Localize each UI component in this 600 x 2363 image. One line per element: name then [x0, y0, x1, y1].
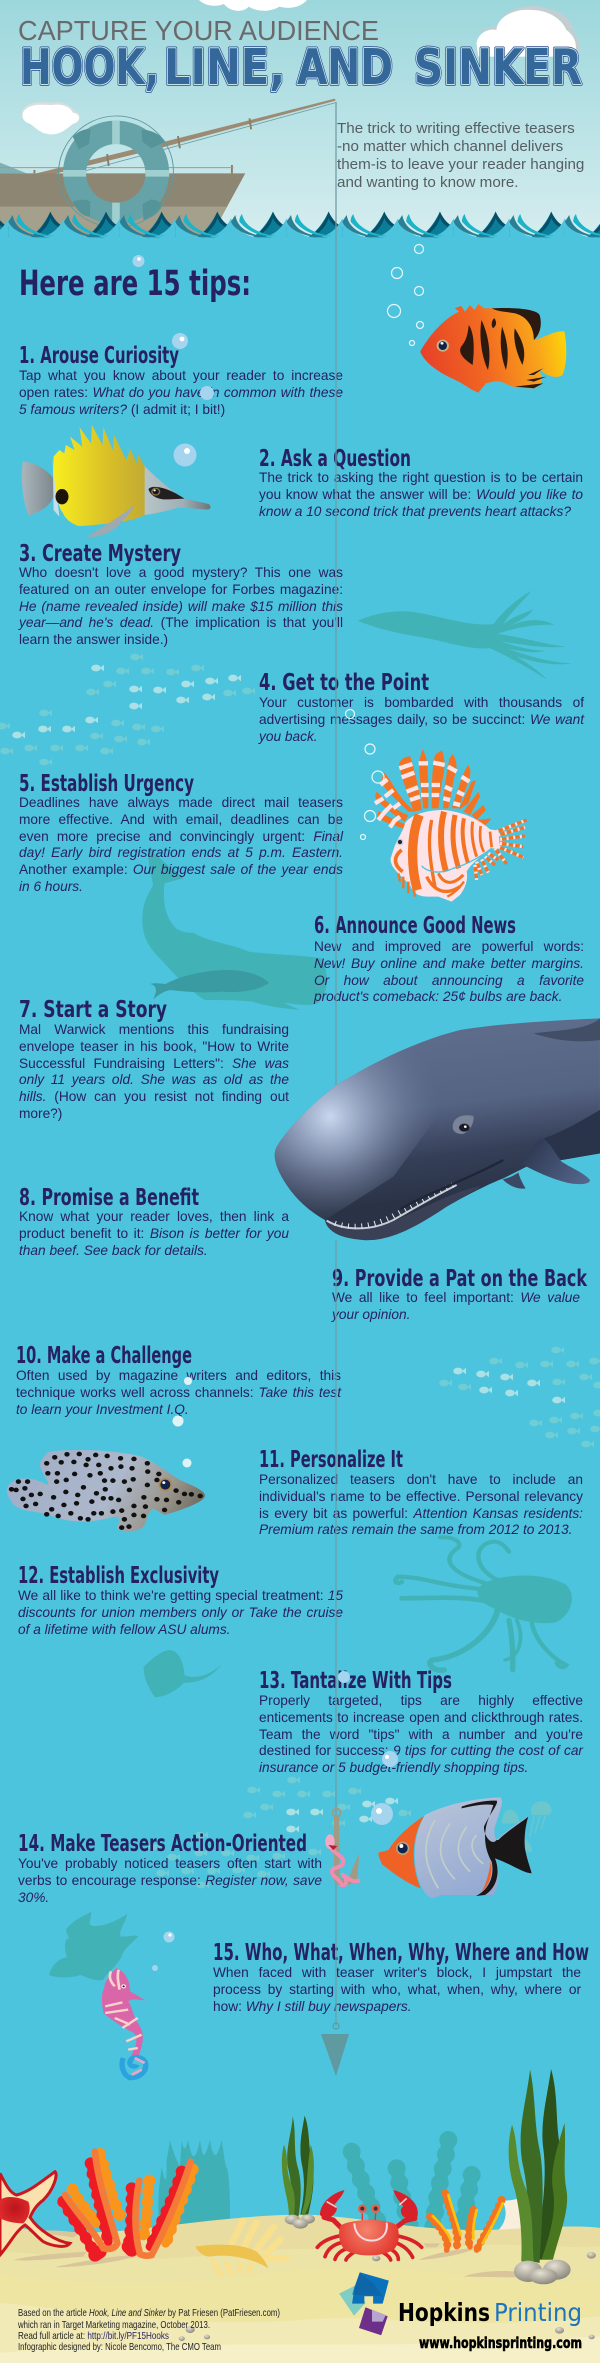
- tip 13 body: destined for success: 9 tips for cutting the cost of car: [259, 1743, 583, 1758]
- tip 14 heading: 14. Make Teasers Action-Oriented: [18, 1831, 307, 1857]
- tail and lower fins: [475, 820, 527, 880]
- tip 1: [19, 343, 343, 417]
- tip 2 body: you know what the answer will be: Would you like to: [259, 487, 583, 502]
- tip 3 body: [18, 565, 343, 647]
- tip 11 body: Premium rates remain the same from 2012 to 2013.: [259, 1522, 572, 1537]
- light fish: [286, 1798, 398, 1832]
- white ring bubbles: [346, 244, 424, 840]
- rocks middle: [285, 2214, 315, 2229]
- tip 11 body: individual's name to be effective. Personal relevancy: [259, 1489, 583, 1504]
- lionfish body: [391, 810, 500, 902]
- credits: Infographic designed by: Nicole Bencomo, The CMO Team: [18, 2341, 221, 2353]
- tip 4 body: you back.: [259, 729, 318, 744]
- tip 5 heading: 5. Establish Urgency: [19, 771, 194, 797]
- coral right: [430, 2193, 503, 2250]
- tip 6 body: New and improved are powerful words:: [314, 939, 584, 954]
- spine bars: [375, 763, 469, 827]
- sand shadows left: [13, 2231, 140, 2267]
- whale eye: [453, 1115, 474, 1134]
- tip 8 body: Know what your reader loves, then link a: [19, 1209, 289, 1224]
- whale small fin: [503, 1173, 526, 1189]
- tip 14 body: [18, 1856, 322, 1906]
- tip 8 body: than beef. See back for details.: [19, 1243, 208, 1258]
- title: hook, line, and sinker: LINE,: [164, 39, 285, 96]
- tip 10: [16, 1343, 342, 1417]
- tip 12 body: [18, 1588, 343, 1637]
- spotted fish: [7, 1450, 205, 1531]
- cloud small: [22, 102, 80, 134]
- tip 3 body: He (name revealed inside) will make $15 million this: [19, 599, 343, 614]
- turtle silhouette: [49, 1912, 139, 1980]
- worm: [325, 1834, 358, 1885]
- blue bubbles: [132, 255, 398, 1971]
- tip 7 body: Successful Fundraising Letters": She was: [19, 1056, 289, 1071]
- dark fish: [148, 1777, 411, 1888]
- lionfish: [375, 749, 527, 902]
- tip 7: [19, 997, 289, 1121]
- tip 2 body: The trick to asking the right question is to be certain: [259, 470, 583, 485]
- tip 13 heading: 13. Tantalize With Tips: [259, 1668, 452, 1694]
- tip 11 heading: 11. Personalize It: [259, 1447, 403, 1473]
- tip 7 body: [19, 1022, 289, 1121]
- coral center: [65, 2152, 191, 2256]
- sperm whale: [275, 1018, 600, 1240]
- tip 13 body: Properly targeted, tips are highly effective: [259, 1693, 583, 1708]
- sky: [0, 0, 600, 240]
- tip 2 heading: 2. Ask a Question: [259, 446, 411, 472]
- tip 7 body: more?): [19, 1106, 62, 1121]
- tip 9 body: We all like to feel important: We value: [332, 1290, 580, 1305]
- tip 13 body: Team the word "tips" with a number and you're: [259, 1727, 583, 1742]
- tip 8 heading: 8. Promise a Benefit: [19, 1185, 199, 1211]
- light fish: [453, 1368, 565, 1403]
- Hopkins: Hopkins: [398, 2298, 490, 2327]
- dark fish: [439, 1347, 600, 1447]
- tip 3 body: learn the answer inside.): [19, 632, 168, 647]
- tip 15 body: When faced with teaser writer's block, I jumpstart the: [213, 1965, 581, 1980]
- tip 4 body: [258, 695, 584, 744]
- small whale inside: [150, 970, 269, 999]
- whale back shade: [533, 1018, 600, 1041]
- tip 5 body: even more precise and convincingly urgent: Final: [19, 829, 343, 844]
- tip 5 body: [19, 795, 344, 894]
- tip 14 body: You've probably noticed teasers often start with: [18, 1856, 322, 1871]
- intro text: The trick to writing effective teasers: [337, 120, 575, 137]
- tip 14 body: verbs to encourage response: Register now, save: [18, 1873, 322, 1888]
- tip 6 body: Or how about announcing a favorite: [314, 973, 584, 988]
- tip 4: [258, 670, 584, 744]
- tip 2 body: know a 10 second trick that prevents heart attacks?: [259, 504, 571, 519]
- white bubbles: [172, 1377, 192, 1468]
- lionfish stripes: [396, 812, 492, 897]
- tip 5 body: Another example: Our biggest sale of the year ends: [19, 862, 343, 877]
- tip 3: [18, 541, 343, 647]
- tip 3 body: featured on an outer envelope for Forbes magazine:: [19, 582, 343, 597]
- pebbles: [179, 2252, 596, 2341]
- sand shadows right: [418, 2243, 517, 2277]
- school near hook: [148, 1777, 411, 1888]
- tip 12 body: of a lifetime with fellow ASU alums.: [18, 1622, 230, 1637]
- school upper left: [0, 654, 255, 765]
- tip 12: [18, 1563, 343, 1637]
- tip 7 heading: 7. Start a Story: [19, 997, 167, 1023]
- tip 7 body: hills. (How can you resist not finding out: [19, 1089, 289, 1104]
- gum and teeth: [327, 1185, 457, 1228]
- tip 7 body: Mal Warwick mentions this fundraising: [19, 1022, 289, 1037]
- school light fish: [12, 665, 241, 738]
- fish stripes: [462, 1801, 532, 1896]
- tip 15 body: [213, 1965, 581, 2015]
- sand layers: [0, 2215, 600, 2363]
- tip 10 body: technique works well across channels: Take this test: [16, 1385, 341, 1400]
- credits: Based on the article Hook, Line and Sinker by Pat Friesen (PatFriesen.com): [18, 2307, 280, 2319]
- tip 11 body: Personalized teasers don't have to include an: [259, 1472, 583, 1487]
- tip 1 body: [19, 368, 343, 417]
- large whale silhouette: [142, 848, 327, 1010]
- stingray silhouette: [144, 1650, 222, 1697]
- title line: capture your audience: CAPTURE YOUR AUDIENCE: [18, 15, 379, 46]
- coral red base: [63, 2163, 182, 2255]
- back seaweed right and shell: [352, 2140, 523, 2232]
- tip 6: [314, 913, 584, 1004]
- heading: here are 15 tips: Here are 15 tips:: [19, 264, 251, 304]
- seabed: [0, 2069, 600, 2363]
- tip 13: [259, 1668, 584, 1775]
- rocks right: [514, 2260, 571, 2284]
- coral light tips: [73, 2154, 193, 2243]
- tip 10 body: Often used by magazine writers and editors, this: [16, 1368, 341, 1383]
- boat hull: [0, 173, 245, 237]
- tip 4 body: Your customer is bombarded with thousands of: [259, 695, 584, 710]
- tip 11: [259, 1447, 583, 1537]
- tip 1 heading: 1. Arouse Curiosity: [19, 343, 179, 369]
- tip 3 body: year—and he's dead. (The implication is that you'll: [19, 615, 343, 630]
- seaweed middle: [282, 2116, 314, 2216]
- title: hook, line, and sinker: HOOK,: [20, 39, 159, 96]
- logo mark: [339, 2272, 389, 2335]
- tip 10 body: [16, 1368, 342, 1417]
- jellyfish and butterfly fish: [378, 1797, 551, 1898]
- tip 12 body: We all like to think we're getting special treatment: 15: [18, 1588, 343, 1603]
- tip 4 body: advertising messages daily, so be succinct: We want: [259, 712, 584, 727]
- tip 13 body: insurance or 5 budget-friendly shopping tips.: [259, 1760, 528, 1775]
- tip 5 body: Deadlines have always made direct mail teasers: [19, 795, 343, 810]
- tip 9 body: [331, 1290, 580, 1322]
- hook and worm: [325, 1809, 359, 1886]
- waves: [0, 212, 600, 244]
- intro text: them-is to leave your reader hanging: [337, 156, 584, 173]
- credits: which ran in Target Marketing magazine, October 2013.: [17, 2319, 210, 2331]
- title: hook, line, and sinker: AND: [297, 39, 393, 96]
- dorsal spines: [375, 749, 492, 829]
- mountain: [0, 163, 27, 173]
- lower jaw: [326, 1186, 482, 1240]
- cloud right: [476, 6, 580, 57]
- tip 5 body: in 6 hours.: [19, 879, 83, 894]
- intro text: -no matter which channel delivers: [337, 138, 563, 155]
- tip 9: [331, 1266, 588, 1322]
- tip 2 body: [259, 470, 583, 519]
- starfish: [0, 2172, 70, 2255]
- tip 15 body: process by starting with who, what, when, why, where or: [213, 1982, 581, 1997]
- tip 8 body: product benefit to it: Bison is better for you: [19, 1226, 289, 1241]
- tip 6 body: New! Buy online and make better margins.: [314, 956, 584, 971]
- tip 12 body: discounts for union members only or Take the cruise: [18, 1605, 343, 1620]
- cloud top: [199, 0, 307, 11]
- tip 11 body: is every bit as powerful: Attention Kansas residents:: [259, 1506, 583, 1521]
- tip 5 body: more effective. And with email, deadlines can be: [19, 812, 343, 827]
- sinker: [321, 2023, 349, 2076]
- tip 4 heading: 4. Get to the Point: [259, 670, 429, 696]
- whale head highlight: [275, 1030, 467, 1220]
- tip 11 body: [259, 1472, 583, 1537]
- back seaweed left: [158, 2140, 230, 2230]
- tip 8: [19, 1185, 289, 1258]
- whale fin: [523, 1138, 590, 1184]
- Printing: Printing: [494, 2298, 582, 2327]
- whale body: [275, 1018, 600, 1240]
- fish body: [415, 1797, 532, 1898]
- tip 6 body: [314, 939, 584, 1004]
- intro text: and wanting to know more.: [337, 174, 519, 191]
- credits: [17, 2307, 280, 2353]
- tip 3 heading: 3. Create Mystery: [19, 541, 181, 567]
- clouds: [22, 0, 580, 134]
- tip 13 body: enticements to increase open and clickthrough rates.: [259, 1710, 583, 1725]
- tip 1 body: Tap what you know about your reader to increase: [19, 368, 343, 383]
- tall seaweed: [509, 2069, 567, 2263]
- railing: [0, 166, 233, 169]
- credits: Read full article at: http://bit.ly/PF15Hooks: [18, 2330, 169, 2342]
- tip 13 body: [259, 1693, 583, 1777]
- school upper right: [439, 1347, 600, 1447]
- tip 8 body: [19, 1209, 289, 1258]
- school dark fish: [0, 654, 255, 765]
- tip 12 heading: 12. Establish Exclusivity: [18, 1563, 219, 1589]
- tip 5: [19, 771, 344, 894]
- tip 15 body: how: Why I still buy newspapers.: [213, 1999, 412, 2014]
- title: hook, line, and sinker: LINE,: [164, 39, 285, 96]
- title: hook, line, and sinker: HOOK,: [20, 39, 159, 96]
- title: hook, line, and sinker: AND: [297, 39, 393, 96]
- crab: [317, 2190, 422, 2260]
- title: hook, line, and sinker: [20, 39, 582, 96]
- mouth line: [400, 1160, 503, 1209]
- fish face: [378, 1816, 424, 1888]
- tip 15: [213, 1938, 589, 2016]
- jellyfish silhouettes: [502, 1801, 551, 1852]
- intro text: [337, 120, 584, 191]
- coral left: [63, 2152, 193, 2256]
- tip 1 body: open rates: What do you have in common with these: [19, 385, 343, 400]
- tip 14 body: 30%.: [18, 1890, 49, 1905]
- title: hook, line, and sinker: AND: [297, 39, 393, 96]
- anemone: [195, 2221, 286, 2275]
- fishing line: [335, 102, 337, 2026]
- tip 3 body: Who doesn't love a good mystery? This one was: [19, 565, 343, 580]
- tip 6 body: product's comeback: 25¢ bulbs are back.: [314, 989, 562, 1004]
- tip 2: [259, 446, 583, 519]
- boat, rod and life ring: [0, 99, 336, 237]
- tip 1 body: 5 famous writers? (I admit it; I bit!): [19, 402, 225, 417]
- logo wordmark: [398, 2298, 582, 2352]
- octopus silhouette: [396, 1537, 572, 1670]
- orange fish: [420, 304, 566, 393]
- yellow fish: [22, 425, 210, 537]
- tip 10 heading: 10. Make a Challenge: [16, 1343, 192, 1369]
- tip 10 body: to learn your Investment I.Q.: [16, 1402, 189, 1417]
- squid silhouette: [358, 591, 572, 680]
- life ring: [59, 116, 173, 227]
- tip 5 body: day! Early bird registration ends at 5 p.m. Eastern.: [19, 845, 343, 860]
- seahorse: [102, 1968, 146, 2078]
- fishing rod: [34, 99, 336, 176]
- tip 7 body: only 11 years old. She was as old as the: [19, 1072, 289, 1087]
- title: hook, line, and sinker: HOOK,: [20, 39, 159, 96]
- tip 14: [18, 1829, 322, 1907]
- title: hook, line, and sinker: LINE,: [164, 39, 285, 96]
- tip 7 body: envelope teaser in his book, "How to Write: [19, 1039, 289, 1054]
- tip 9 body: your opinion.: [332, 1307, 410, 1322]
- hook: [334, 1817, 359, 1886]
